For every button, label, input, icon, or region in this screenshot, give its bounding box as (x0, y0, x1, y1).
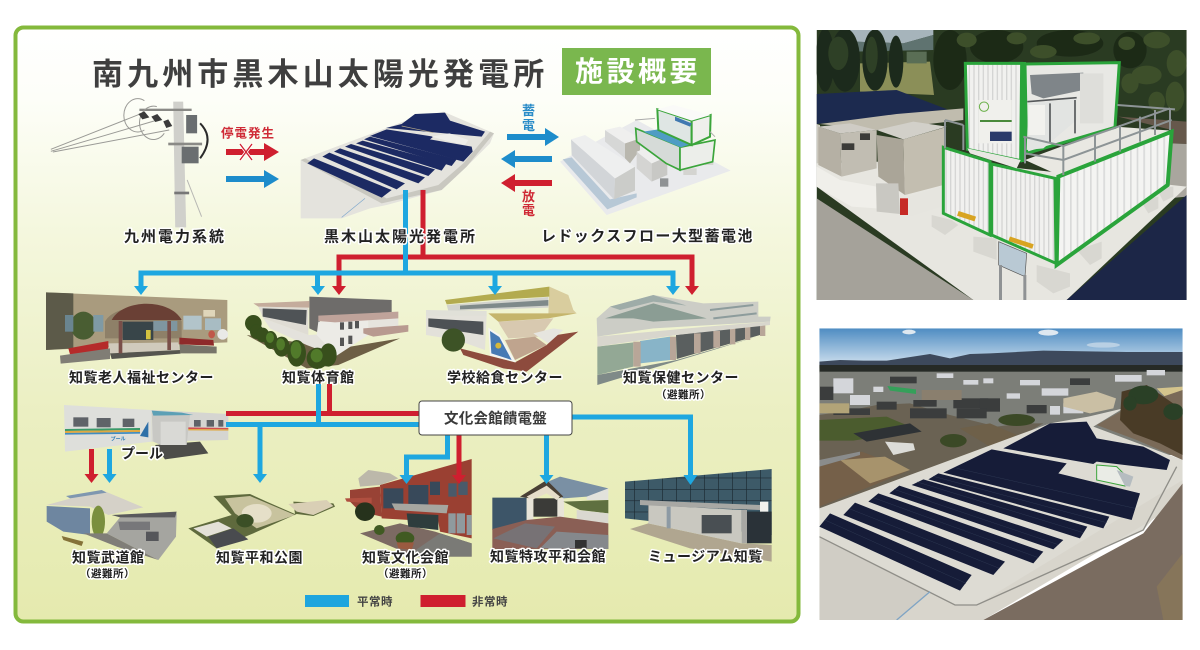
feeder panel box (419, 401, 572, 435)
label: Chiran cultural hall (shelter) (362, 549, 449, 580)
illustration: utility pole (51, 99, 208, 227)
label: Chiran budokan (shelter): （避難所） (80, 567, 135, 580)
label: Chiran gymnasium: 知覧体育館 (282, 369, 354, 385)
feeder panel box: 文化会館饋電盤 (444, 410, 547, 428)
illustration: school lunch center (426, 287, 578, 372)
photo: redox flow battery containers (816, 28, 1187, 300)
label: charge: 電 (522, 118, 535, 133)
legend: normal: 平常時 (357, 594, 393, 608)
arrow: charge blue arrow (507, 128, 559, 146)
illustration: pool (64, 405, 228, 459)
label: Chiran cultural hall (shelter): （避難所） (378, 567, 433, 580)
illustration: solar power plant (301, 112, 494, 218)
illustration: redox flow battery (560, 105, 731, 215)
legend (305, 594, 508, 608)
panel: facility overview diagram (16, 28, 798, 622)
illustration: Chiran health center (597, 295, 771, 385)
connection lines: plant to facilities (134, 190, 699, 295)
illustration: Museum Chiran (625, 469, 772, 562)
label: Chiran peace park: 知覧平和公園 (216, 549, 303, 565)
arrow: outage red arrow with cross (226, 143, 279, 161)
label: Kurokiyama solar power plant: 黒木山太陽光発電所 (324, 228, 477, 246)
label: Chiran budokan (shelter) (72, 549, 144, 580)
legend: normal (305, 594, 393, 608)
label: charge: 蓄 (522, 103, 535, 118)
label: power outage: 停電発生 (221, 126, 275, 140)
arrow: supply blue arrow (501, 150, 552, 168)
label: discharge: 電 (522, 203, 535, 218)
label: Chiran Peace Museum hall: 知覧特攻平和会館 (490, 548, 606, 564)
label: redox flow battery: レドックスフロー大型蓄電池 (541, 227, 754, 245)
label: Chiran health center (shelter): （避難所） (656, 388, 711, 401)
heading badge: facility overview: 施設概要 (575, 56, 701, 87)
label: Chiran elderly welfare center: 知覧老人福祉センター (69, 369, 214, 385)
illustration: Chiran elderly welfare center (46, 292, 228, 364)
legend: emergency (420, 594, 508, 608)
title: 南九州市黒木山太陽光発電所 (92, 57, 548, 92)
label: Chiran health center (shelter): 知覧保健センター (623, 369, 739, 385)
illustration: pool: プール (111, 436, 126, 443)
arrow: discharge red arrow (501, 174, 552, 192)
label: pool: プール (121, 446, 163, 462)
illustration: Chiran cultural hall (345, 459, 472, 557)
illustration: Chiran Peace Museum hall (492, 477, 608, 549)
label: school lunch center: 学校給食センター (447, 369, 563, 385)
arrow: normal grid blue arrow (226, 170, 279, 188)
illustration: Chiran budokan (47, 490, 177, 560)
legend: emergency: 非常時 (472, 594, 508, 608)
label: Chiran health center (shelter) (623, 369, 739, 401)
label: discharge: 放 (522, 189, 535, 204)
label: Chiran cultural hall (shelter): 知覧文化会館 (362, 549, 449, 565)
illustration: Chiran gymnasium (245, 297, 408, 369)
illustration: Chiran peace park (188, 494, 335, 548)
label: Chiran budokan (shelter): 知覧武道館 (72, 549, 144, 565)
connection lines: gymnasium to feeder panel and facilities (84, 384, 698, 485)
heading badge: facility overview (562, 48, 711, 95)
label: Museum Chiran: ミュージアム知覧 (648, 548, 763, 564)
label: Kyushu Electric grid: 九州電力系統 (124, 229, 226, 246)
photo: aerial view of solar plant (819, 328, 1183, 620)
